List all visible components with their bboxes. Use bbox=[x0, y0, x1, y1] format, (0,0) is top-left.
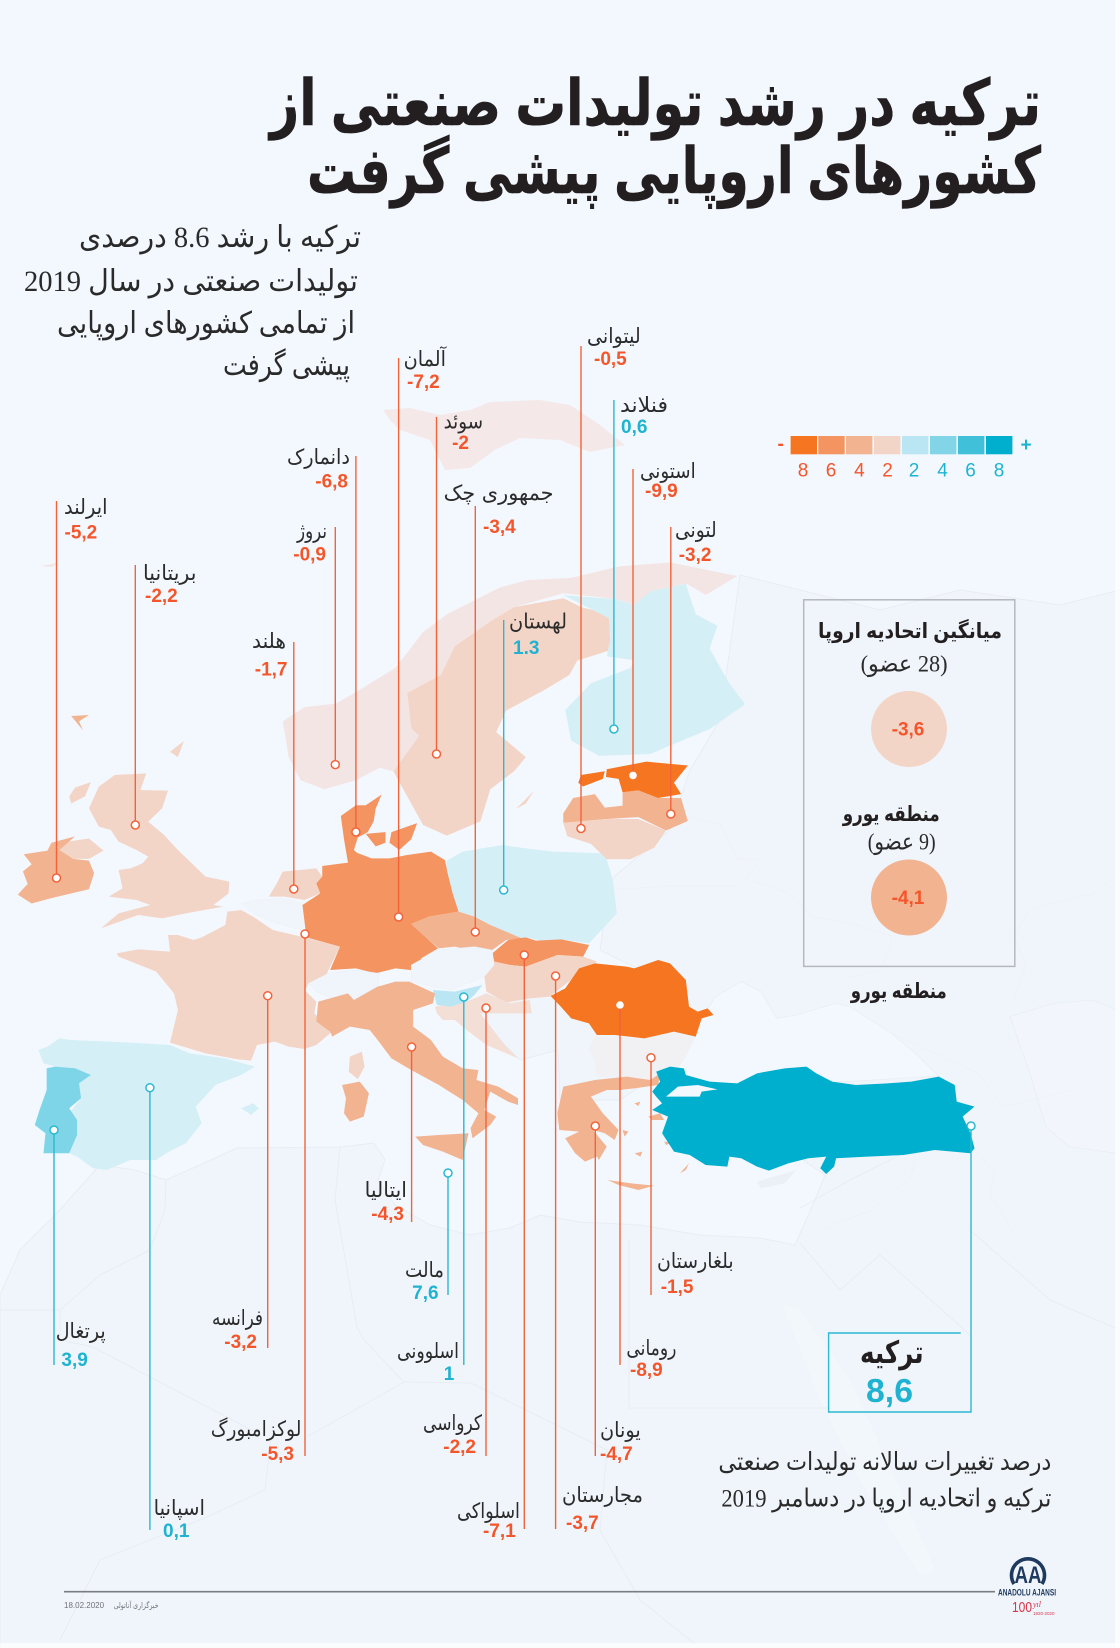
callout: Lithuania: -0,5 bbox=[594, 349, 627, 370]
callout: Slovenia bbox=[397, 993, 468, 1385]
callout: Bulgaria: -1,5 bbox=[661, 1277, 694, 1298]
callout: Greece: -4,7 bbox=[600, 1444, 633, 1465]
legend: colour scale: 4 bbox=[854, 460, 865, 482]
callout: Romania: رومانی bbox=[626, 1336, 676, 1360]
callout: Slovakia bbox=[457, 951, 528, 1542]
panel: averages box: -3,6 bbox=[892, 720, 924, 740]
callout: Italy: -4,3 bbox=[371, 1204, 404, 1225]
callout: Spain bbox=[146, 1084, 205, 1542]
callout: Bulgaria: بلغارستان bbox=[657, 1249, 734, 1273]
legend: colour scale: 8 bbox=[798, 460, 808, 482]
legend: colour scale: 4 bbox=[937, 460, 948, 482]
callout: Poland bbox=[500, 610, 567, 894]
callout: Slovakia: -7,1 bbox=[483, 1521, 516, 1542]
description text block: ترکیه و اتحادیه اروپا در دسامبر 2019 bbox=[721, 1486, 1051, 1514]
countries: northern group bbox=[18, 562, 737, 904]
callout: Finland: فنلاند bbox=[620, 393, 668, 417]
panel: averages box: منطقه یورو bbox=[842, 803, 940, 826]
callout: France: فرانسه bbox=[212, 1306, 263, 1330]
callout: Germany: آلمان bbox=[404, 346, 447, 371]
callout: Romania: -8,9 bbox=[630, 1360, 663, 1381]
legend: colour scale: 6 bbox=[965, 460, 976, 482]
subtitle text block: تولیدات صنعتی در سال 2019 bbox=[24, 265, 358, 298]
logo: Anadolu Agency bbox=[998, 1559, 1056, 1616]
legend: colour scale: - bbox=[778, 434, 784, 455]
footer rule and date bbox=[64, 1592, 995, 1610]
countries: Romania, Bulgaria, Greece, Turkey bbox=[551, 960, 974, 1190]
callout: Portugal: پرتغال bbox=[56, 1319, 106, 1343]
legend: colour scale: 6 bbox=[826, 460, 836, 482]
callout: Ireland: ایرلند bbox=[64, 495, 108, 519]
callout: Czech Republic: جمهوری چک bbox=[444, 481, 554, 505]
callout: Luxembourg: -5,3 bbox=[261, 1444, 294, 1465]
callout: Britain: -2,2 bbox=[145, 586, 178, 607]
country: Svalbard bbox=[383, 400, 625, 470]
callout: Sweden bbox=[432, 410, 483, 758]
legend: colour scale: 2 bbox=[882, 460, 893, 482]
panel: averages box: (28 عضو) bbox=[861, 652, 948, 678]
callout: Netherlands: -1,7 bbox=[255, 660, 288, 681]
panel: averages box: میانگین اتحادیه اروپا bbox=[818, 618, 1002, 643]
background land: Russia, Middle East and Africa bbox=[0, 575, 1120, 1648]
subtitle text block bbox=[24, 221, 361, 383]
logo: Anadolu Agency: 1920-2020 bbox=[1033, 1611, 1055, 1616]
callout: Spain: اسپانیا bbox=[154, 1496, 205, 1520]
callout: Portugal: 3,9 bbox=[61, 1350, 88, 1371]
legend: colour scale: 8 bbox=[994, 460, 1004, 482]
title bbox=[268, 67, 1042, 209]
map of Europe: coloured countries bbox=[18, 400, 974, 1190]
callout: Norway bbox=[293, 519, 339, 769]
callout: Slovakia: اسلواکی bbox=[457, 1499, 520, 1523]
callout: France bbox=[212, 992, 272, 1353]
legend: colour scale: 2 bbox=[909, 460, 919, 482]
subtitle text block: ترکیه با رشد 8.6 درصدی bbox=[79, 221, 361, 254]
callout: Turkey box bbox=[829, 1122, 975, 1412]
callout: Ireland bbox=[52, 495, 108, 882]
callout: Turkey box: ترکیه bbox=[860, 1335, 924, 1371]
logo: Anadolu Agency: ANADOLU AJANSI bbox=[998, 1588, 1056, 1598]
callout: Luxembourg: لوکزامبورگ bbox=[211, 1417, 301, 1441]
callout: Malta: مالت bbox=[405, 1258, 444, 1282]
callout: Malta bbox=[405, 1169, 452, 1304]
callout: Latvia bbox=[667, 518, 717, 818]
panel: averages box: -4,1 bbox=[892, 888, 925, 909]
callout: Hungary bbox=[552, 972, 643, 1534]
footer rule and date: 18.02.2020 bbox=[64, 1601, 105, 1610]
subtitle text block: پیشی گرفت bbox=[223, 348, 350, 383]
callout: Ireland: -5,2 bbox=[64, 523, 97, 544]
callout: Czech Republic bbox=[444, 481, 554, 936]
legend: colour scale bbox=[778, 434, 1032, 482]
callout: Lithuania bbox=[577, 324, 641, 832]
description text block bbox=[718, 1449, 1051, 1514]
callout: Finland: 0,6 bbox=[621, 417, 647, 438]
callout: Bulgaria bbox=[647, 1054, 734, 1298]
callout: Greece: یونان bbox=[600, 1418, 641, 1442]
logo: Anadolu Agency: AA bbox=[1014, 1562, 1042, 1589]
legend: colour scale: + bbox=[1020, 435, 1032, 456]
panel: averages box: (9 عضو) bbox=[868, 830, 936, 856]
callout: Netherlands bbox=[252, 629, 298, 893]
callout: Finland bbox=[610, 393, 668, 733]
callout: Croatia bbox=[423, 1004, 490, 1458]
callout: Sweden: سوئد bbox=[444, 410, 483, 434]
callout: Croatia: -2,2 bbox=[443, 1437, 476, 1458]
heading: euro zone below box: منطقه یورو bbox=[850, 980, 947, 1003]
callout: Norway: نروژ bbox=[296, 519, 327, 543]
callout: Malta: 7,6 bbox=[412, 1283, 439, 1304]
callout: Spain: 0,1 bbox=[163, 1521, 190, 1542]
callout: Denmark: دانمارک bbox=[287, 445, 350, 469]
callout: Turkey box: 8,6 bbox=[866, 1372, 913, 1409]
callout: Latvia: -3,2 bbox=[679, 545, 711, 566]
callout: Italy: ایتالیا bbox=[365, 1178, 407, 1202]
callout: Poland: 1.3 bbox=[513, 638, 539, 659]
callout: Slovenia: اسلوونی bbox=[397, 1339, 459, 1363]
callout: Denmark bbox=[287, 445, 360, 836]
callout: Italy bbox=[365, 1043, 416, 1225]
callout: Romania bbox=[616, 1001, 676, 1381]
callout: Slovenia: 1 bbox=[444, 1364, 455, 1385]
callout: Lithuania: لیتوانی bbox=[587, 324, 641, 348]
callout: Denmark: -6,8 bbox=[315, 472, 348, 492]
callout: Poland: لهستان bbox=[509, 610, 567, 634]
callout: Hungary: -3,7 bbox=[566, 1513, 599, 1534]
callout: Greece bbox=[591, 1122, 641, 1465]
callout: Latvia: لتونی bbox=[675, 518, 717, 542]
footer rule and date: خبرگزاری آناتولی bbox=[114, 1600, 159, 1610]
callout: Portugal bbox=[50, 1126, 106, 1371]
callout: Croatia: کرواسی bbox=[423, 1411, 482, 1435]
logo: Anadolu Agency: 100 bbox=[1012, 1599, 1032, 1616]
callout: Czech Republic: -3,4 bbox=[483, 517, 516, 538]
callout: Estonia: -9,9 bbox=[645, 481, 678, 502]
callout: Luxembourg bbox=[211, 930, 309, 1465]
callout: Germany bbox=[395, 346, 447, 921]
countries: central and western group bbox=[35, 773, 617, 1170]
panel: averages box bbox=[804, 600, 1015, 966]
callout: Sweden: -2 bbox=[452, 433, 469, 454]
countries: Baltic and Finland bbox=[563, 584, 745, 859]
callout: Estonia bbox=[629, 459, 696, 779]
logo: Anadolu Agency: yıl bbox=[1032, 1600, 1042, 1609]
callout: Britain bbox=[131, 561, 196, 829]
callout: Netherlands: هلند bbox=[252, 629, 286, 653]
callout: Estonia: استونی bbox=[640, 459, 696, 483]
callout: Germany: -7,2 bbox=[407, 372, 440, 393]
callout: Norway: -0,9 bbox=[293, 545, 326, 566]
callout: Britain: بریتانیا bbox=[143, 561, 196, 585]
subtitle text block: از تمامی کشورهای اروپایی bbox=[57, 307, 355, 341]
description text block: درصد تغییرات سالانه تولیدات صنعتی bbox=[718, 1449, 1051, 1476]
callout: Hungary: مجارستان bbox=[562, 1483, 643, 1507]
callout: France: -3,2 bbox=[224, 1332, 257, 1353]
